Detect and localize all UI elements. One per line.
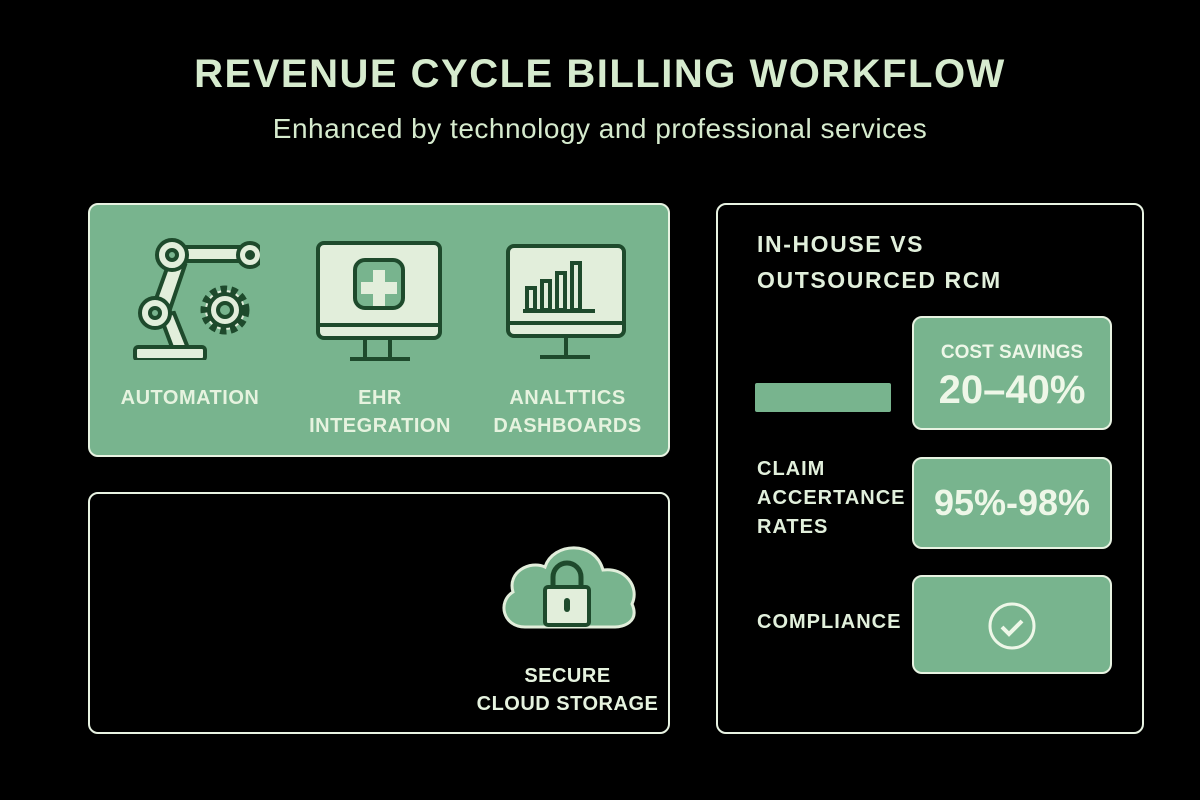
label: secure cloud storage	[477, 665, 658, 715]
bar	[755, 383, 891, 412]
label: EHR integration: EHR	[358, 387, 402, 409]
icon: robot arm	[133, 238, 260, 360]
panel: technology	[88, 203, 670, 457]
label: analytics dashboards: ANALTTICS	[509, 387, 626, 409]
box: cost savings	[912, 316, 1112, 430]
label: compliance: COMPLIANCE	[757, 611, 901, 633]
panel: in-house vs outsourced	[716, 203, 1144, 734]
label: claim acceptance	[757, 458, 906, 538]
subtitle: Enhanced by technology and professional services	[273, 113, 927, 144]
label: secure cloud storage: SECURE	[524, 665, 611, 687]
label: claim acceptance: ACCERTANCE	[757, 487, 906, 509]
title: REVENUE CYCLE BILLING WORKFLOW	[194, 52, 1006, 96]
box: compliance check	[912, 575, 1112, 674]
icon: analytics monitor	[506, 244, 626, 359]
label: analytics dashboards: DASHBOARDS	[493, 415, 642, 437]
label: secure cloud storage: CLOUD STORAGE	[477, 693, 658, 715]
panel: secure cloud storage	[88, 492, 670, 734]
heading: in-house vs outsourced: OUTSOURCED RCM	[757, 267, 1002, 293]
label: claim acceptance: CLAIM	[757, 458, 825, 480]
heading: in-house vs outsourced	[757, 231, 1002, 293]
box: cost savings: 20–40%	[939, 368, 1085, 412]
box: cost savings: COST SAVINGS	[941, 342, 1083, 363]
label: EHR integration: INTEGRATION	[309, 415, 451, 437]
box: claim rates	[912, 457, 1112, 549]
label: analytics dashboards	[493, 387, 642, 437]
label: claim acceptance: RATES	[757, 516, 828, 538]
label: EHR integration	[309, 387, 451, 437]
label: automation: AUTOMATION	[121, 387, 259, 409]
box: claim rates: 95%-98%	[934, 482, 1090, 523]
icon: EHR monitor	[316, 241, 442, 361]
icon: cloud lock	[502, 546, 636, 628]
heading: in-house vs outsourced: IN-HOUSE VS	[757, 231, 924, 257]
